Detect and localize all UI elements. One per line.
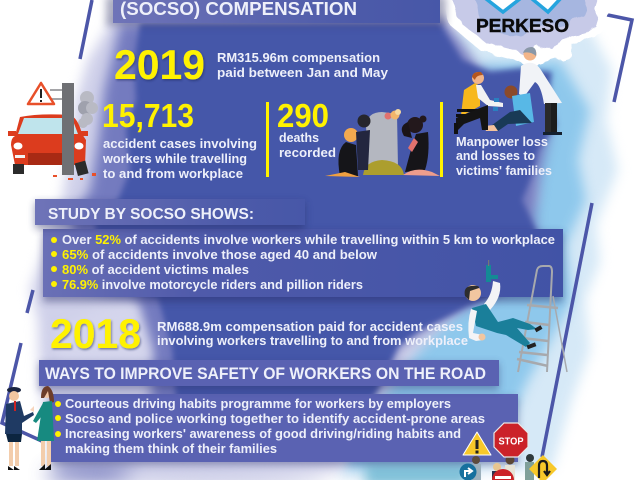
stat description: to and from workplace — [103, 166, 243, 181]
medic — [454, 72, 503, 134]
manpower loss caption: and losses to — [456, 148, 535, 163]
findings text: Over 52% of accidents involve workers while travelling within 5 km to workplace — [62, 232, 555, 247]
worker arm and head — [484, 281, 500, 310]
warning sign — [463, 432, 491, 455]
officer — [5, 387, 34, 470]
icon: ladder — [517, 266, 567, 372]
woman — [33, 386, 54, 470]
panel: study heading: STUDY BY SOCSO SHOWS: — [48, 206, 254, 223]
findings text: 76.9% involve motorcycle riders and pillion riders — [62, 277, 363, 292]
icon: police officer and woman — [5, 386, 54, 470]
stat: 15,713 — [102, 97, 257, 181]
flowers — [384, 109, 401, 120]
warning sign — [28, 83, 64, 104]
2019 description: RM315.96m compensation — [217, 50, 380, 65]
ways text — [65, 396, 485, 456]
icon: mourners at grave — [325, 109, 440, 177]
logo chevrons — [485, 0, 561, 12]
stat: 290 deaths — [277, 97, 336, 160]
stat description — [102, 136, 257, 181]
manpower loss caption: victims' families — [456, 163, 552, 178]
U-turn sign — [529, 455, 557, 480]
findings text: 65% of accidents involve those aged 40 and below — [62, 247, 378, 262]
logo wordmark: PERKESO — [476, 16, 569, 36]
stat: 15,713: 15,713 — [102, 97, 194, 134]
turn arrow sign — [460, 464, 476, 480]
icon: crashed car at pole — [8, 83, 98, 180]
manpower loss caption — [456, 134, 552, 178]
yellow divider left — [266, 102, 269, 177]
stat description: workers while travelling — [102, 151, 247, 166]
deaths label: recorded — [279, 145, 336, 160]
manpower loss caption: Manpower loss — [456, 134, 548, 149]
logo: PERKESO — [436, 0, 612, 62]
bullets — [55, 401, 61, 437]
icon: road signs group — [460, 423, 557, 480]
smoke — [78, 91, 98, 128]
2019 headline figure: 2019 — [114, 41, 205, 88]
panel: ways list — [50, 394, 518, 465]
2018 headline figure: 2018 — [50, 310, 141, 357]
ways text: Courteous driving habits programme for workers by employers — [65, 396, 451, 411]
panel: ways heading: WAYS TO IMPROVE SAFETY OF WORKERS ON THE ROAD — [45, 364, 486, 383]
stat description: accident cases involving — [103, 136, 257, 151]
left mourner — [325, 114, 370, 177]
ways text: Increasing workers' awareness of good driving/riding habits and — [65, 426, 461, 441]
2019 description — [217, 50, 389, 80]
no entry sign — [492, 469, 514, 480]
stop sign: STOP — [498, 436, 524, 448]
tombstone — [366, 112, 398, 168]
icon: medic and doctor helping victim — [454, 47, 562, 135]
ways text: Socso and police working together to identify accident-prone areas — [65, 411, 485, 426]
worker boots — [534, 325, 542, 332]
people holding signs — [472, 454, 534, 480]
findings text — [62, 232, 555, 292]
grave mound — [363, 160, 404, 175]
panel: study heading — [35, 199, 305, 229]
2019 description: paid between Jan and May — [217, 65, 389, 80]
pole — [62, 83, 74, 175]
icon: falling worker with drill — [465, 260, 542, 349]
deaths label: deaths — [279, 130, 319, 145]
car body — [11, 114, 86, 165]
debris — [53, 173, 96, 180]
title panel — [106, 0, 446, 26]
yellow divider right — [440, 102, 443, 177]
2018 description: RM688.9m compensation paid for accident cases — [157, 319, 463, 334]
doctor — [519, 47, 562, 135]
bullets — [51, 237, 57, 287]
worker torso — [472, 304, 537, 347]
ways text: making them think of their families — [65, 441, 277, 456]
2018 description — [157, 319, 468, 348]
right mourner — [402, 116, 440, 176]
2018 description: involving workers travelling to and from workplace — [157, 333, 468, 348]
panel: ways heading — [39, 360, 499, 390]
seated victim — [484, 86, 534, 131]
drill — [486, 265, 491, 282]
stat: 290 deaths: 290 — [277, 97, 329, 134]
panel: study findings list — [43, 229, 563, 302]
deaths label — [279, 130, 336, 160]
findings text: 80% of accident victims males — [62, 262, 249, 277]
